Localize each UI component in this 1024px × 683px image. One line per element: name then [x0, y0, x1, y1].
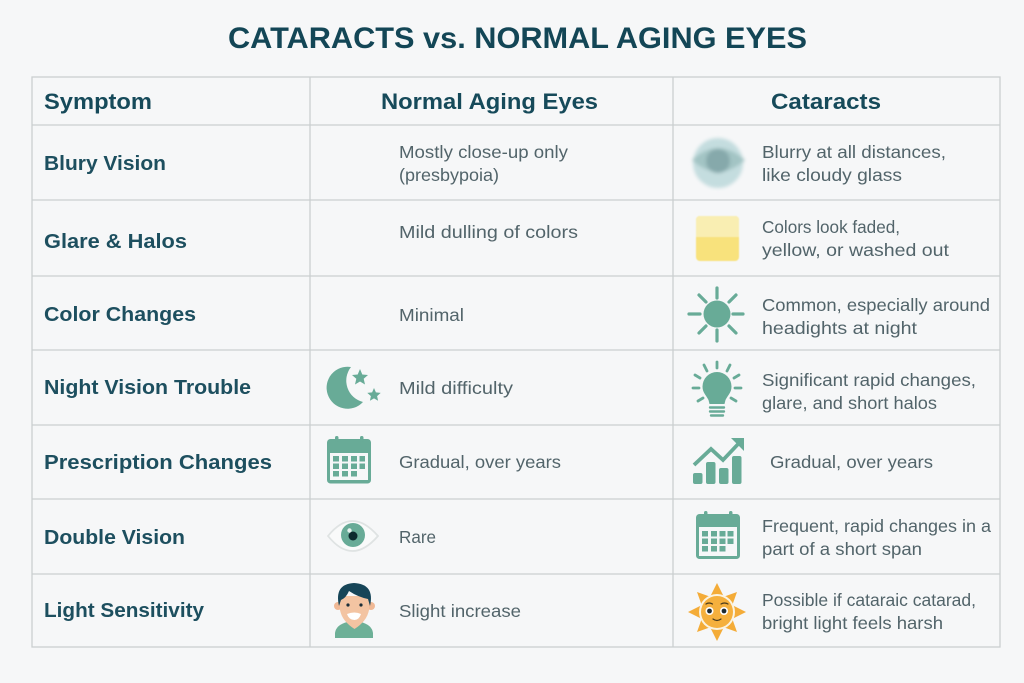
row: blurry vision: (presbypoia) [399, 165, 499, 185]
icon: light bulb with rays [693, 362, 741, 416]
row: light sensitivity [44, 590, 976, 633]
icon: blurred eye [692, 138, 745, 188]
icon: eye [328, 521, 378, 551]
row: prescription changes [44, 451, 933, 474]
title: CATARACTS vs. NORMAL AGING EYES [228, 22, 807, 55]
icon: smiling person [334, 583, 375, 638]
icon: calendar (cataracts) [696, 511, 740, 559]
row: glare and halos: Glare & Halos [44, 230, 187, 253]
row: prescription changes: Gradual, over years [770, 452, 933, 472]
row: blurry vision: Blury Vision [44, 152, 166, 175]
row: color changes: Minimal [399, 305, 464, 325]
icon: green sun [689, 288, 743, 341]
row: double vision: Frequent, rapid changes in a [762, 516, 991, 536]
row: glare and halos: Colors look faded, [762, 217, 900, 237]
row: color changes [44, 295, 990, 338]
table grid [32, 77, 1000, 647]
row: color changes: headights at night [762, 318, 917, 338]
row: glare and halos [44, 217, 949, 260]
row: light sensitivity: Light Sensitivity [44, 599, 205, 622]
header row: Normal Aging Eyes [381, 89, 598, 114]
icon: rising bar chart with arrow [693, 438, 744, 484]
row: blurry vision: like cloudy glass [762, 165, 902, 185]
row: blurry vision: Mostly close-up only [399, 142, 568, 162]
row: night vision trouble: Mild difficulty [399, 378, 513, 398]
row: prescription changes: Gradual, over years [399, 452, 561, 472]
icon: crescent moon and stars [327, 367, 381, 409]
icon: yellow colour swatch [696, 216, 739, 261]
header row [44, 89, 881, 114]
row: prescription changes: Prescription Changes [44, 451, 272, 474]
row: double vision: Rare [399, 527, 436, 547]
row: blurry vision [44, 142, 946, 185]
row: color changes: Color Changes [44, 303, 196, 326]
header row: Cataracts [771, 89, 881, 114]
row: glare and halos: yellow, or washed out [762, 240, 949, 260]
icon: calendar (normal aging) [327, 436, 371, 484]
row: blurry vision: Blurry at all distances, [762, 142, 946, 162]
row: light sensitivity: bright light feels harsh [762, 613, 943, 633]
row: night vision trouble: glare, and short halos [762, 393, 937, 413]
row: night vision trouble: Night Vision Trouble [44, 376, 251, 399]
row: night vision trouble [44, 370, 976, 413]
row: double vision: part of a short span [762, 539, 922, 559]
icon: orange sun with face [688, 583, 746, 641]
row: glare and halos: Mild dulling of colors [399, 222, 578, 242]
row: light sensitivity: Slight increase [399, 601, 521, 621]
row: double vision: Double Vision [44, 526, 185, 549]
row: double vision [44, 516, 991, 559]
row: light sensitivity: Possible if cataraic catarad, [762, 590, 976, 610]
row: night vision trouble: Significant rapid changes, [762, 370, 976, 390]
row: color changes: Common, especially around [762, 295, 990, 315]
header row: Symptom [44, 89, 152, 114]
